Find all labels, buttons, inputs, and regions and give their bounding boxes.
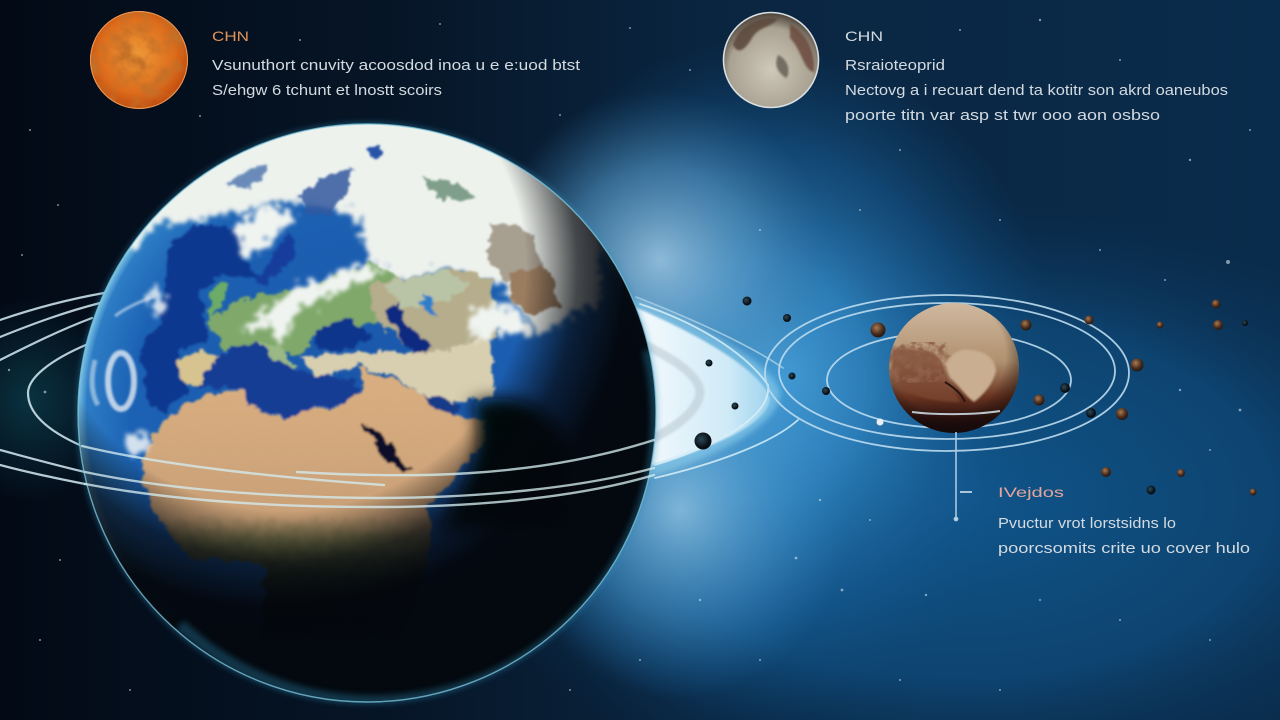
- Earth globe: [70, 110, 670, 710]
- moons around Pluto: [694, 296, 1256, 496]
- Italy and Balkans: [255, 342, 300, 372]
- text block: Sun description: S/ehgw 6 tchunt et lnostt scoirs: [212, 82, 442, 99]
- orbit rings in front of Earth: [82, 440, 654, 507]
- panel: Pluto text: [998, 484, 1250, 557]
- text block: Moon description: [845, 57, 1228, 124]
- globe surface: [70, 110, 670, 710]
- text block: Pluto description: [998, 515, 1250, 557]
- orbit rings: back: [765, 295, 1129, 451]
- Europe green: [207, 262, 400, 355]
- glowing ring disc right of Earth: [630, 297, 780, 482]
- pale grey-green highland: [422, 177, 476, 200]
- heading: Moon: CHN: [845, 28, 883, 44]
- diagram: Pluto system: [694, 295, 1256, 521]
- ice speckle seas: [300, 170, 353, 213]
- text block: Moon description: Rsraioteoprid: [845, 57, 945, 74]
- text block: Pluto description: Pvuctur vrot lorstsidns lo: [998, 515, 1176, 532]
- atmosphere halo: [76, 122, 658, 704]
- Atlantic storm swirl: [92, 296, 155, 409]
- text block: Pluto description: poorcsomits crite uo cover hulo: [998, 540, 1250, 557]
- Aral Sea: [422, 293, 434, 317]
- limb light on the night side: [180, 350, 656, 701]
- callout line: [954, 432, 972, 521]
- Black Sea: [315, 317, 372, 350]
- orbit rings behind Earth: [0, 293, 798, 484]
- grey mountains east: [488, 222, 545, 280]
- Mediterranean: [196, 342, 357, 420]
- panel: Moon: [723, 12, 1228, 124]
- Anatolia and Iran ridge: [300, 335, 495, 403]
- globe rim: [78, 124, 656, 702]
- Red Sea: [361, 423, 414, 470]
- icon: Moon: [723, 12, 819, 108]
- text block: Sun description: [212, 57, 581, 99]
- text block: Sun description: Vsunuthort cnuvity acoosdod inoa u e e:uod btst: [212, 57, 581, 74]
- night side shading: [78, 158, 656, 702]
- Caspian Sea: [384, 300, 430, 353]
- Africa and Arabia: [140, 364, 486, 606]
- Britain: [206, 280, 226, 322]
- white cloud streaks: [232, 205, 537, 340]
- Atlantic clouds: [124, 286, 168, 458]
- heart lobe: [945, 350, 996, 402]
- land and seas: [140, 145, 560, 640]
- pale green upper steppe: [385, 268, 470, 305]
- Pluto: [889, 303, 1019, 433]
- heading: Sun: CHN: [212, 28, 249, 44]
- heading: Pluto: IVejdos: [998, 484, 1064, 500]
- textured highlands: [892, 348, 960, 402]
- Iberia: [177, 352, 223, 386]
- Scandinavia sea: [254, 233, 296, 287]
- Persian Gulf: [424, 395, 461, 416]
- north Atlantic deep water: [140, 223, 261, 413]
- text block: Moon description: poorte titn var asp st twr ooo aon osbso: [845, 107, 1160, 124]
- Asia steppe: [370, 268, 500, 360]
- panel: Sun: [90, 11, 581, 109]
- white cloud cap: [120, 110, 600, 335]
- text block: Moon description: Nectovg a i recuart dend ta kotitr son akrd oaneubos: [845, 82, 1228, 99]
- icon: Sun: [90, 11, 188, 109]
- night region east of Africa: [440, 399, 570, 530]
